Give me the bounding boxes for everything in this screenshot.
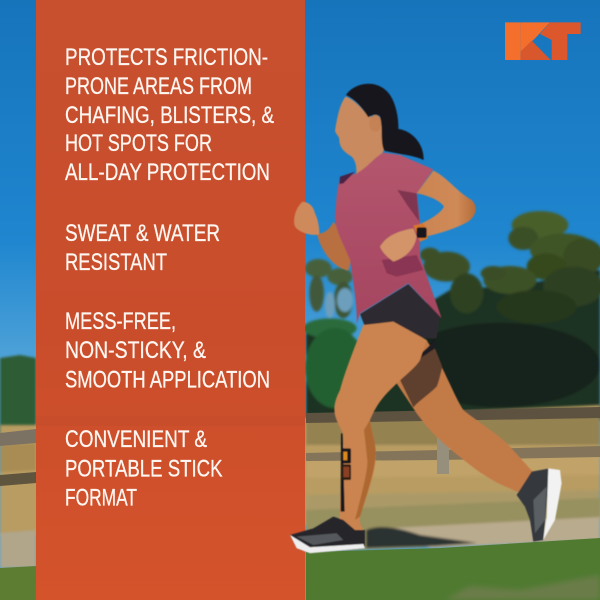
- background: fence: [0, 407, 600, 486]
- benefit text: portable stick format: [65, 426, 223, 512]
- runner: [290, 84, 562, 553]
- benefit text: friction protection: CHAFING, BLISTERS, &: [65, 102, 274, 129]
- far leg: [397, 340, 538, 494]
- benefit text: friction protection: ALL-DAY PROTECTION: [65, 159, 270, 186]
- panel: benefits: [36, 0, 305, 600]
- logo: KT: [505, 22, 581, 60]
- thigh shadow: [400, 348, 442, 407]
- benefit text: mess-free application: NON-STICKY, &: [65, 337, 206, 364]
- benefit text: mess-free application: SMOOTH APPLICATION: [65, 366, 270, 394]
- benefit text: mess-free application: [65, 308, 270, 394]
- runner shadow: [366, 527, 477, 548]
- background: trees: [0, 211, 600, 440]
- hair: [346, 84, 424, 160]
- benefit text: friction protection: PRONE AREAS FROM: [65, 73, 252, 100]
- far arm: [413, 171, 476, 239]
- hand: [380, 228, 417, 262]
- background: dirt path: [0, 498, 600, 568]
- benefit text: sweat and water resistant: [65, 220, 220, 276]
- shorts: [360, 284, 440, 339]
- benefit text: portable stick format: FORMAT: [65, 484, 137, 512]
- benefit text: friction protection: PROTECTS FRICTION-: [65, 44, 268, 71]
- far shoe: [517, 468, 550, 542]
- tree clusters: [303, 211, 600, 338]
- near shoe: [290, 517, 365, 553]
- watch: [413, 223, 428, 242]
- shirt: [335, 153, 442, 324]
- benefit text: friction protection: HOT SPOTS FOR: [65, 130, 212, 157]
- benefit text: mess-free application: MESS-FREE,: [65, 308, 176, 335]
- near leg: [334, 322, 427, 537]
- benefit text: sweat and water resistant: SWEAT & WATER: [65, 220, 220, 247]
- background: green grass: [0, 538, 600, 600]
- benefit text: portable stick format: PORTABLE STICK: [65, 456, 223, 482]
- background: dry grass: [0, 405, 600, 535]
- benefit text: friction protection: [65, 44, 274, 186]
- benefit text: portable stick format: CONVENIENT &: [65, 426, 207, 453]
- ear: [369, 115, 381, 132]
- runner: upper body: [294, 84, 476, 339]
- kinesiology tape: [341, 433, 345, 512]
- fist: [294, 202, 319, 235]
- benefit text: sweat and water resistant: RESISTANT: [65, 249, 167, 276]
- neck and face: [335, 97, 384, 175]
- runner: legs and shoes: [290, 322, 562, 553]
- near arm: [317, 222, 351, 271]
